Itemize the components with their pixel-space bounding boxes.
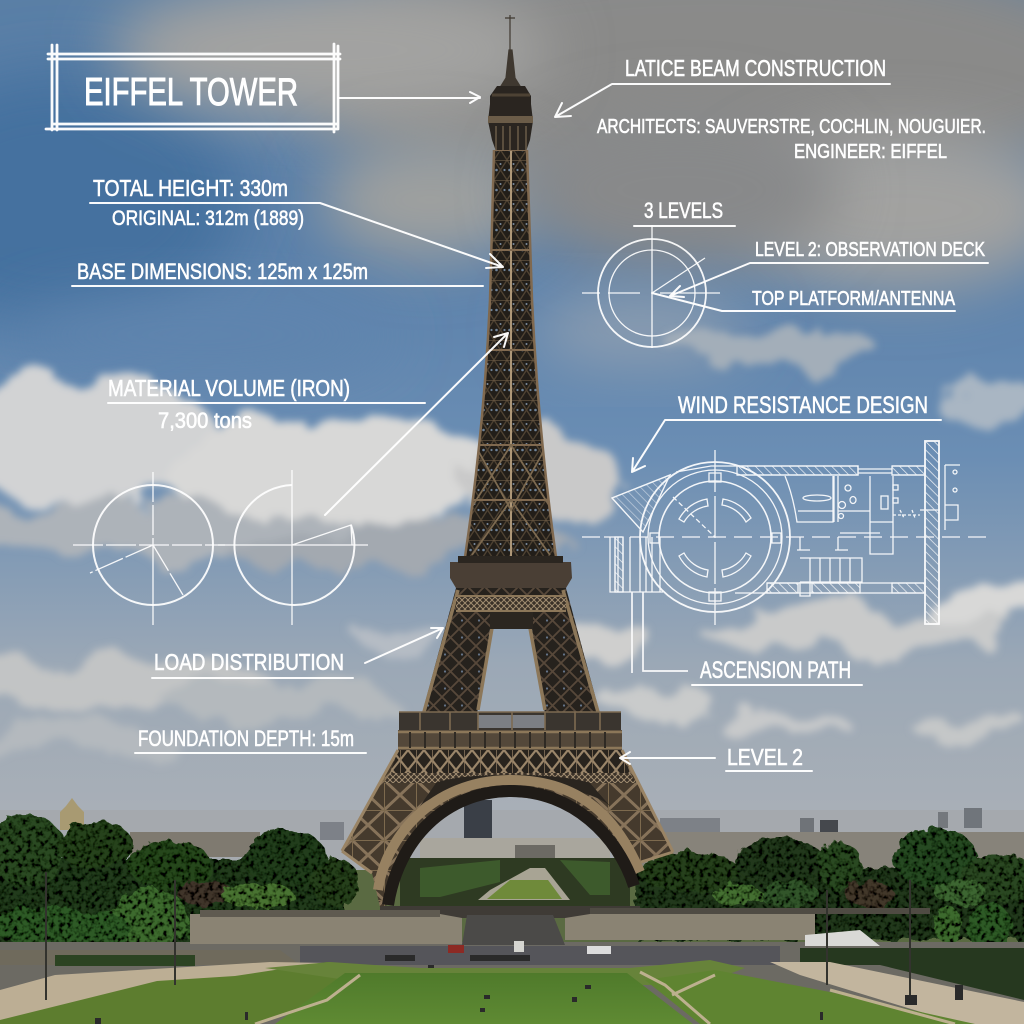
first level platform	[399, 712, 621, 731]
callout: total height: TOTAL HEIGHT: 330m	[93, 175, 288, 201]
title box	[46, 44, 340, 132]
text block: architects and engineer: ENGINEER: EIFFEL	[794, 141, 947, 163]
tower top cabin	[488, 86, 533, 154]
callout: load distribution: LOAD DISTRIBUTION	[154, 649, 344, 675]
blueprint plan drawing	[582, 441, 990, 673]
callout: total height: ORIGINAL: 312m (1889)	[112, 207, 304, 230]
city skyline and trees	[0, 798, 1024, 953]
callout: 3 levels with circle diagram: 3 LEVELS	[644, 198, 723, 223]
tower antenna and spire	[501, 15, 520, 86]
callout: base dimensions: BASE DIMENSIONS: 125m x 125m	[77, 259, 368, 284]
circle diagram	[582, 225, 720, 348]
pie diagram: right circle and arrow to tower	[218, 333, 508, 625]
callout: ascension path: ASCENSION PATH	[700, 657, 851, 684]
callout: wind resistance design	[632, 392, 941, 472]
text block: architects and engineer	[597, 116, 986, 163]
upper shaft	[466, 150, 555, 556]
callout: material volume	[108, 375, 425, 433]
title: EIFFEL TOWER	[84, 71, 298, 114]
arrow: title to tower	[338, 92, 480, 103]
legs between levels	[422, 588, 600, 714]
callout: 3 levels with circle diagram: TOP PLATFORM/ANTENNA	[752, 288, 956, 310]
callout: 3 levels with circle diagram	[582, 198, 988, 348]
foreground esplanade, roads and lawn	[0, 872, 1024, 1024]
callout: load distribution	[152, 628, 443, 678]
callout: foundation depth: FOUNDATION DEPTH: 15m	[138, 726, 354, 751]
callout: material volume: 7,300 tons	[158, 408, 252, 433]
callout: level 2: LEVEL 2	[727, 744, 803, 770]
callout: lattice beam construction	[555, 55, 890, 117]
callout: material volume: MATERIAL VOLUME (IRON)	[108, 375, 350, 401]
second level platform	[450, 562, 572, 588]
callout: total height	[90, 175, 503, 268]
pie diagram: left circle	[73, 472, 225, 625]
callout: level 2	[620, 744, 812, 771]
callout: lattice beam construction: LATICE BEAM CONSTRUCTION	[625, 55, 886, 81]
ascension path lead lines	[632, 592, 688, 673]
lower trusses and arch	[342, 750, 673, 907]
Eiffel Tower	[342, 15, 673, 907]
callout: wind resistance design: WIND RESISTANCE DESIGN	[678, 392, 928, 419]
